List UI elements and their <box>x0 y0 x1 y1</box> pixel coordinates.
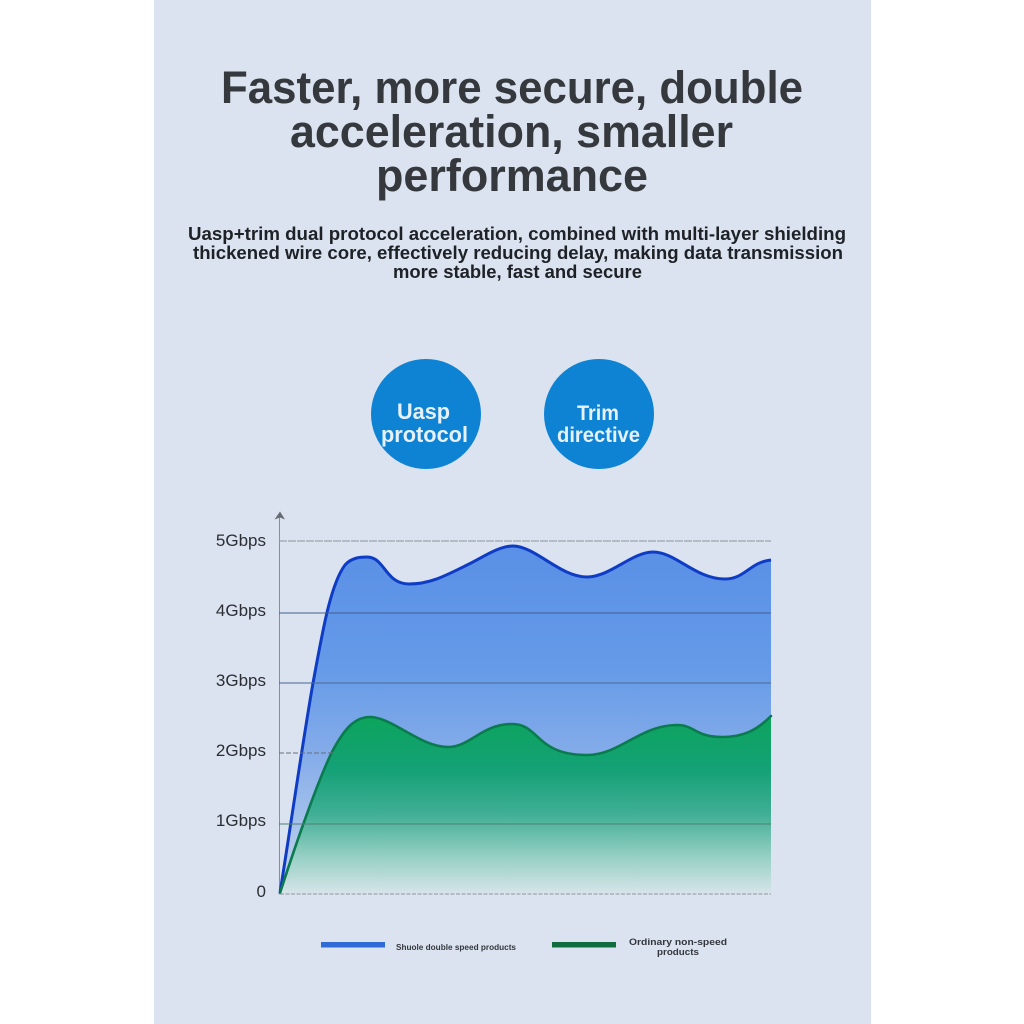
y axis labels: 3Gbps <box>216 671 266 690</box>
subtitle text block: Uasp+trim dual protocol acceleration, combined with multi-layer shielding <box>188 223 846 244</box>
series: Shuole double speed area <box>280 546 771 893</box>
legend: Ordinary non-speed products: Ordinary non-speed <box>629 937 727 947</box>
legend: Ordinary non-speed products: products <box>657 947 699 957</box>
legend <box>321 937 727 957</box>
title <box>221 62 803 201</box>
y axis labels: 4Gbps <box>216 601 266 620</box>
y axis labels: 0 <box>257 882 266 901</box>
badge: Trim directive <box>544 359 654 469</box>
subtitle text block <box>188 223 846 282</box>
y axis labels: 1Gbps <box>216 811 266 830</box>
y axis labels: 5Gbps <box>216 531 266 550</box>
y axis labels: 2Gbps <box>216 741 266 760</box>
legend: Shuole double speed products: Shuole double speed products <box>396 943 517 952</box>
series: ordinary non-speed area <box>280 716 771 893</box>
badge: Uasp protocol <box>371 359 481 469</box>
badge: Trim directive: directive <box>557 424 640 447</box>
badge: Uasp protocol: protocol <box>381 422 468 447</box>
subtitle text block: thickened wire core, effectively reducing delay, making data transmission <box>193 242 843 263</box>
badge: Uasp protocol: Uasp <box>397 399 450 424</box>
legend: Ordinary non-speed products <box>552 937 727 957</box>
panel: background <box>154 0 871 1024</box>
badge: Trim directive: Trim <box>577 402 619 425</box>
y axis labels <box>216 531 266 901</box>
y axis arrow <box>274 512 285 893</box>
area chart: speed comparison <box>216 512 771 901</box>
title: performance <box>376 150 648 201</box>
legend: Shuole double speed products <box>321 942 517 952</box>
subtitle text block: more stable, fast and secure <box>393 261 642 282</box>
title: acceleration, smaller <box>290 106 733 157</box>
title: Faster, more secure, double <box>221 62 803 113</box>
